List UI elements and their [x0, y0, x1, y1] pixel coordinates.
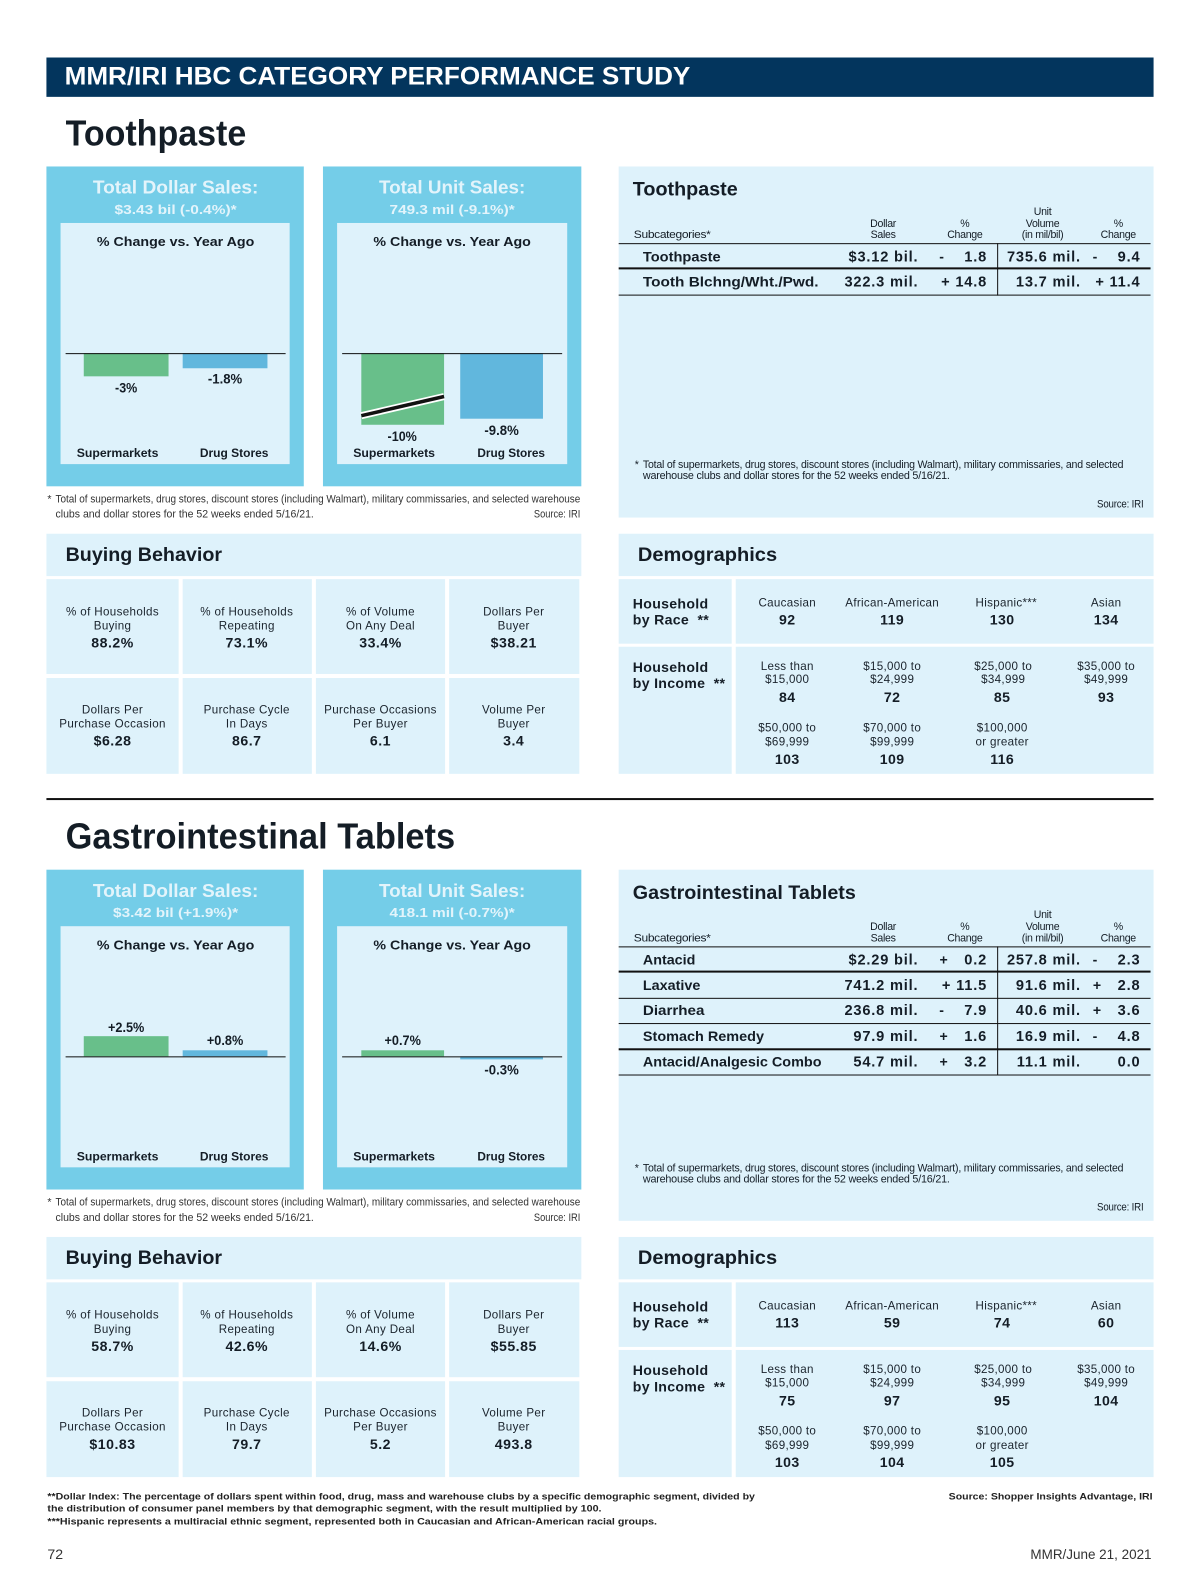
panel: demographics: 104 [880, 1454, 905, 1470]
panel: buying behavior: 73.1% [225, 635, 268, 651]
table rows: 9.4 [1118, 249, 1141, 265]
panel: demographics: $15,000 [765, 673, 809, 686]
table header: Subcategories* [634, 932, 711, 944]
bar chart: unit sales change: -9.8% [484, 423, 519, 438]
panel: total dollar sales: $3.42 bil (+1.9%)* [113, 905, 239, 920]
footnote: sales panels: Total of supermarkets, drug stores, discount stores (including Walmart), military commissaries, and selected warehouse [56, 1197, 580, 1209]
bar chart: dollar sales change: Drug Stores [200, 446, 269, 460]
panel: demographics: $15,000 to [863, 660, 921, 673]
panel: total dollar sales [46, 870, 304, 1190]
panel: subcategory table [619, 870, 1154, 1221]
panel: demographics: by Race ** [633, 612, 709, 628]
panel: buying behavior: Per Buyer [353, 1421, 408, 1434]
table header: Unit [1034, 909, 1052, 921]
panel: buying behavior: $38.21 [491, 635, 537, 651]
table rows: 97.9 mil. [853, 1029, 918, 1045]
panel: demographics: $35,000 to [1077, 1363, 1135, 1376]
panel: demographics: $50,000 to [758, 721, 816, 734]
panel: total unit sales: % Change vs. Year Ago [373, 937, 531, 952]
panel: buying behavior: 493.8 [495, 1436, 533, 1452]
table rows: Antacid/Analgesic Combo [643, 1053, 822, 1069]
panel: buying behavior: Per Buyer [353, 717, 408, 730]
table header: (in mil/bil) [1022, 229, 1063, 241]
panel: total unit sales [323, 870, 581, 1190]
bar chart: unit sales change: Drug Stores [477, 446, 545, 460]
table rows: 54.7 mil. [853, 1054, 918, 1070]
panel: subcategory table [619, 166, 1154, 518]
table rows: 1.6 [964, 1029, 987, 1045]
panel: buying behavior: 42.6% [225, 1338, 268, 1354]
panel: buying behavior: Dollars Per [82, 703, 143, 716]
table header: Change [1101, 932, 1136, 944]
panel: demographics: 104 [1094, 1392, 1119, 1408]
panel: demographics: 119 [880, 612, 904, 628]
publication date: MMR/June 21, 2021 [1030, 1546, 1152, 1562]
panel: total dollar sales [46, 166, 304, 486]
panel: total unit sales: % Change vs. Year Ago [373, 234, 531, 249]
panel: buying behavior: Purchase Cycle [204, 1407, 290, 1420]
panel: buying behavior: 88.2% [91, 635, 134, 651]
panel: buying behavior: % of Households [66, 1309, 159, 1322]
panel: demographics: $15,000 to [863, 1363, 921, 1376]
panel: demographics: by Income ** [633, 675, 726, 691]
panel: demographics: Asian [1091, 596, 1121, 609]
table footnote: * [635, 459, 639, 471]
table header: % [1114, 218, 1124, 230]
table rows: - [1093, 1028, 1098, 1044]
table footnote [635, 459, 1143, 510]
table rows: Laxative [643, 977, 701, 993]
table rows: + [1093, 977, 1101, 993]
table rows: - [939, 248, 944, 264]
panel: buying behavior: Repeating [219, 1323, 275, 1336]
panel: demographics: Hispanic*** [976, 596, 1037, 609]
table rows: 0.2 [964, 953, 987, 969]
panel: demographics: 105 [990, 1454, 1015, 1470]
panel: buying behavior: 3.4 [503, 733, 524, 749]
table footnote: Source: IRI [1097, 498, 1143, 510]
table rows [619, 243, 1151, 296]
panel: demographics: 72 [884, 689, 900, 705]
header banner: MMR/IRI HBC CATEGORY PERFORMANCE STUDY [65, 63, 691, 91]
panel: demographics: 97 [884, 1392, 900, 1408]
bar chart: dollar sales change: -3% [115, 380, 137, 395]
panel: demographics: $69,999 [765, 736, 809, 749]
table footnote: warehouse clubs and dollar stores for the 52 weeks ended 5/16/21. [642, 1173, 950, 1185]
table rows: + [940, 1053, 948, 1069]
panel: total dollar sales: Total Dollar Sales: [93, 178, 258, 198]
table footnote: Total of supermarkets, drug stores, discount stores (including Walmart), military commissaries, and selected [643, 1162, 1124, 1174]
panel: demographics: 59 [884, 1315, 900, 1331]
panel: demographics: 116 [990, 751, 1014, 767]
table rows: 4.8 [1118, 1029, 1140, 1045]
table rows: 3.6 [1118, 1003, 1140, 1019]
panel: buying behavior: Buyer [498, 1421, 530, 1434]
table header: Change [947, 229, 983, 241]
table rows: $2.29 bil. [849, 953, 918, 969]
panel: buying behavior: $10.83 [89, 1436, 136, 1452]
panel: buying behavior: Purchase Occasion [59, 717, 166, 730]
table header: Dollar [870, 921, 897, 933]
panel: demographics: Asian [1091, 1300, 1121, 1313]
table header: Unit [1034, 206, 1052, 218]
panel: demographics: African-American [845, 596, 939, 609]
table rows: 741.2 mil. [844, 978, 918, 994]
panel: demographics: Household [633, 595, 708, 611]
table header: % [960, 921, 970, 933]
bar chart: unit sales change [342, 353, 562, 460]
panel: demographics: $100,000 [977, 721, 1028, 734]
panel: demographics: $24,999 [870, 1376, 914, 1389]
bar chart: unit sales change [342, 1033, 562, 1163]
panel: demographics: 85 [994, 689, 1010, 705]
panel: buying behavior: Repeating [219, 620, 275, 633]
footnote: sales panels [47, 493, 580, 521]
panel: demographics: by Income ** [633, 1378, 726, 1394]
panel: buying behavior: Dollars Per [483, 605, 544, 618]
table rows: + 11.5 [942, 978, 987, 994]
footnotes: dollar index and Hispanic: the distribution of consumer panel members by that demographic segment, with the result multiplied by 100. [47, 1503, 602, 1514]
panel: buying behavior: Buyer [498, 717, 530, 730]
bar chart: dollar sales change [66, 353, 286, 460]
panel: buying behavior: Dollars Per [82, 1407, 143, 1420]
bar chart: unit sales change: Drug Stores [477, 1149, 545, 1163]
panel: demographics: $49,999 [1084, 673, 1128, 686]
panel: demographics: 103 [775, 751, 800, 767]
table header: Change [947, 932, 983, 944]
table header: % [960, 218, 970, 230]
table rows: 1.8 [964, 249, 987, 265]
panel: demographics: $70,000 to [863, 1425, 921, 1438]
table rows: + [940, 952, 948, 968]
bar chart: unit sales change: -10% [388, 429, 417, 444]
footnotes: dollar index and Hispanic: ***Hispanic represents a multiracial ethnic segment, represented both in Caucasian and African-American racial groups. [47, 1516, 657, 1527]
panel: demographics: 74 [994, 1315, 1010, 1331]
bar chart: unit sales change: -0.3% [484, 1063, 519, 1078]
panel: buying behavior: % of Households [66, 605, 159, 618]
panel: buying behavior: Volume Per [482, 1407, 545, 1420]
table rows: - [939, 1002, 944, 1018]
panel: buying behavior: % of Volume [346, 1309, 415, 1322]
table footnote: * [635, 1162, 639, 1174]
panel: total unit sales: 749.3 mil (-9.1%)* [390, 202, 516, 217]
table rows [619, 946, 1151, 1076]
panel: total unit sales: Total Unit Sales: [379, 178, 525, 198]
panel: buying behavior: Purchase Occasion [59, 1421, 166, 1434]
bar chart: unit sales change: Supermarkets [353, 446, 435, 460]
panel: demographics: African-American [845, 1300, 939, 1313]
footnote: sales panels: Source: IRI [534, 1212, 580, 1224]
panel: buying behavior: Buying Behavior [66, 545, 223, 566]
table footnote: Total of supermarkets, drug stores, discount stores (including Walmart), military commissaries, and selected [643, 459, 1124, 471]
table header: Dollar [870, 218, 897, 230]
table rows: + 11.4 [1095, 275, 1141, 291]
panel: buying behavior: $55.85 [491, 1338, 537, 1354]
bar chart: dollar sales change: +0.8% [207, 1033, 243, 1048]
bar chart: dollar sales change: Supermarkets [77, 1149, 159, 1163]
panel: demographics: Household [633, 659, 708, 675]
panel: demographics: by Race ** [633, 1315, 709, 1331]
panel: demographics: $15,000 [765, 1376, 809, 1389]
bar chart: dollar sales change: Supermarkets [77, 446, 159, 460]
table rows: 13.7 mil. [1016, 275, 1081, 291]
panel: demographics: $35,000 to [1077, 660, 1135, 673]
panel: buying behavior: Dollars Per [483, 1309, 544, 1322]
table footnote: warehouse clubs and dollar stores for the 52 weeks ended 5/16/21. [642, 470, 950, 482]
panel: total unit sales [323, 166, 581, 486]
table rows: Stomach Remedy [643, 1028, 764, 1044]
table header: Change [1101, 229, 1136, 241]
panel: demographics: Caucasian [758, 596, 816, 609]
footnote: sales panels [47, 1197, 580, 1224]
panel: buying behavior: Purchase Cycle [204, 703, 290, 716]
panel: buying behavior: In Days [226, 717, 268, 730]
footnote: sales panels: clubs and dollar stores for the 52 weeks ended 5/16/21. [56, 1212, 314, 1224]
panel: demographics: 134 [1094, 612, 1119, 628]
bar chart: dollar sales change [66, 1020, 286, 1163]
panel: demographics: $34,999 [981, 673, 1025, 686]
panel: total dollar sales: Total Dollar Sales: [93, 881, 258, 901]
table rows: 2.3 [1118, 953, 1140, 969]
panel: demographics: Demographics [638, 1248, 777, 1269]
panel: demographics: 113 [775, 1315, 799, 1331]
table rows: 40.6 mil. [1016, 1003, 1081, 1019]
panel: demographics: 130 [990, 612, 1015, 628]
panel: demographics: 109 [880, 751, 905, 767]
panel: total unit sales: Total Unit Sales: [379, 881, 525, 901]
panel: demographics: Household [633, 1362, 708, 1378]
bar chart: unit sales change: Supermarkets [353, 1149, 435, 1163]
table rows: Toothpaste [643, 248, 721, 264]
source credit: Source: Shopper Insights Advantage, IRI [949, 1491, 1153, 1502]
table footnote [635, 1162, 1143, 1214]
table rows: 7.9 [964, 1003, 987, 1019]
panel: demographics: Household [633, 1299, 708, 1315]
panel: buying behavior: 14.6% [359, 1338, 402, 1354]
table header [634, 909, 1136, 944]
table header: Subcategories* [634, 229, 711, 241]
bar chart: dollar sales change: Drug Stores [200, 1149, 269, 1163]
panel: demographics: Caucasian [758, 1300, 816, 1313]
panel: demographics: 75 [779, 1392, 795, 1408]
table rows: 0.0 [1118, 1054, 1140, 1070]
panel: buying behavior: % of Households [200, 1309, 293, 1322]
panel: buying behavior: Buying Behavior [66, 1248, 223, 1269]
panel: buying behavior: 58.7% [91, 1338, 134, 1354]
panel: demographics: $100,000 [977, 1425, 1028, 1438]
panel: demographics [619, 534, 1154, 774]
table rows: + 14.8 [941, 275, 987, 291]
panel: total unit sales: 418.1 mil (-0.7%)* [390, 905, 516, 920]
panel: buying behavior: Buyer [498, 620, 530, 633]
table rows: 11.1 mil. [1017, 1054, 1081, 1070]
panel: buying behavior: 86.7 [232, 733, 262, 749]
panel: demographics: $50,000 to [758, 1425, 816, 1438]
table rows: Diarrhea [643, 1002, 705, 1018]
panel: demographics: Demographics [638, 545, 777, 566]
footnote: sales panels: Total of supermarkets, drug stores, discount stores (including Walmart), military commissaries, and selected warehouse [56, 493, 580, 505]
table rows: 91.6 mil. [1016, 978, 1081, 994]
panel: buying behavior: % of Volume [346, 605, 415, 618]
panel: buying behavior [46, 534, 581, 774]
table rows: Antacid [643, 952, 695, 968]
panel: demographics: 60 [1098, 1315, 1114, 1331]
panel: buying behavior: $6.28 [94, 733, 131, 749]
footnotes: dollar index and Hispanic [47, 1491, 756, 1527]
bar chart: dollar sales change: +2.5% [108, 1020, 144, 1035]
table rows: 257.8 mil. [1007, 953, 1081, 969]
panel: demographics: 84 [779, 689, 795, 705]
page number: 72 [47, 1546, 63, 1562]
table header: % [1114, 921, 1124, 933]
panel: buying behavior: 6.1 [370, 733, 391, 749]
footnote: sales panels: * [47, 493, 52, 505]
panel: buying behavior: Buying [94, 620, 131, 633]
heading: Toothpaste: Toothpaste [66, 112, 246, 153]
panel: buying behavior: 79.7 [232, 1436, 262, 1452]
panel: buying behavior: % of Households [200, 605, 293, 618]
panel: total dollar sales: % Change vs. Year Ago [97, 234, 254, 249]
table header: Volume [1026, 218, 1060, 230]
panel: demographics: $69,999 [765, 1439, 809, 1452]
panel: demographics: 93 [1098, 689, 1114, 705]
panel: demographics: 103 [775, 1454, 800, 1470]
panel: demographics: Less than [761, 1363, 814, 1376]
table rows: 735.6 mil. [1007, 249, 1081, 265]
panel: demographics: $70,000 to [863, 721, 921, 734]
header banner [46, 58, 1154, 97]
panel: demographics: $25,000 to [974, 660, 1032, 673]
table footnote: Source: IRI [1097, 1202, 1143, 1214]
panel: buying behavior: Buyer [498, 1323, 530, 1336]
panel: total dollar sales: % Change vs. Year Ago [97, 937, 254, 952]
table rows: 2.8 [1118, 978, 1140, 994]
panel: demographics: $34,999 [981, 1376, 1025, 1389]
panel: subcategory table: Toothpaste [633, 180, 738, 201]
section: Gastrointestinal Tablets [46, 816, 1154, 1477]
section: Toothpaste [46, 112, 1154, 774]
footnote: sales panels: Source: IRI [534, 509, 580, 521]
panel: demographics: Hispanic*** [976, 1300, 1037, 1313]
panel: demographics: $99,999 [870, 1439, 914, 1452]
panel: demographics: Less than [761, 660, 814, 673]
panel: buying behavior: On Any Deal [346, 1323, 415, 1336]
table header: (in mil/bil) [1022, 932, 1063, 944]
table rows: - [1093, 952, 1098, 968]
panel: demographics: or greater [976, 1439, 1029, 1452]
table rows: + [1093, 1002, 1101, 1018]
footnotes: dollar index and Hispanic: **Dollar Index: The percentage of dollars spent within food, drug, mass and warehouse clubs by a specific demographic segment, divided by [47, 1491, 756, 1502]
table header [634, 206, 1136, 241]
panel: buying behavior: On Any Deal [346, 620, 415, 633]
table header: Sales [871, 932, 896, 944]
panel: buying behavior: 5.2 [370, 1436, 391, 1452]
table rows: 3.2 [964, 1054, 987, 1070]
panel: demographics: $24,999 [870, 673, 914, 686]
table rows: Tooth Blchng/Wht./Pwd. [643, 274, 819, 290]
panel: demographics: 95 [994, 1392, 1010, 1408]
table rows: 322.3 mil. [844, 275, 918, 291]
table rows: 16.9 mil. [1016, 1029, 1081, 1045]
panel: buying behavior: Buying [94, 1323, 131, 1336]
table header: Sales [871, 229, 896, 241]
panel: total dollar sales: $3.43 bil (-0.4%)* [115, 202, 238, 217]
panel: buying behavior: Purchase Occasions [324, 703, 437, 716]
panel: demographics: $25,000 to [974, 1363, 1032, 1376]
table rows: 236.8 mil. [844, 1003, 918, 1019]
panel: demographics: or greater [976, 736, 1029, 749]
panel: buying behavior: In Days [226, 1421, 268, 1434]
panel: demographics: $49,999 [1084, 1376, 1128, 1389]
panel: demographics: $99,999 [870, 736, 914, 749]
panel: demographics: 92 [779, 612, 795, 628]
panel: buying behavior [46, 1237, 581, 1477]
panel: demographics [619, 1237, 1154, 1477]
bar chart: unit sales change: +0.7% [385, 1033, 421, 1048]
heading: Gastrointestinal Tablets: Gastrointestinal Tablets [66, 816, 455, 857]
panel: subcategory table: Gastrointestinal Tablets [633, 883, 856, 904]
footnote: sales panels: * [47, 1197, 52, 1209]
panel: buying behavior: 33.4% [359, 635, 402, 651]
table rows: - [1093, 248, 1098, 264]
footnote: sales panels: clubs and dollar stores for the 52 weeks ended 5/16/21. [56, 509, 314, 521]
panel: buying behavior: Purchase Occasions [324, 1407, 437, 1420]
table rows: + [940, 1028, 948, 1044]
table rows: $3.12 bil. [849, 249, 918, 265]
panel: buying behavior: Volume Per [482, 703, 545, 716]
table header: Volume [1026, 921, 1060, 933]
bar chart: dollar sales change: -1.8% [208, 371, 242, 386]
